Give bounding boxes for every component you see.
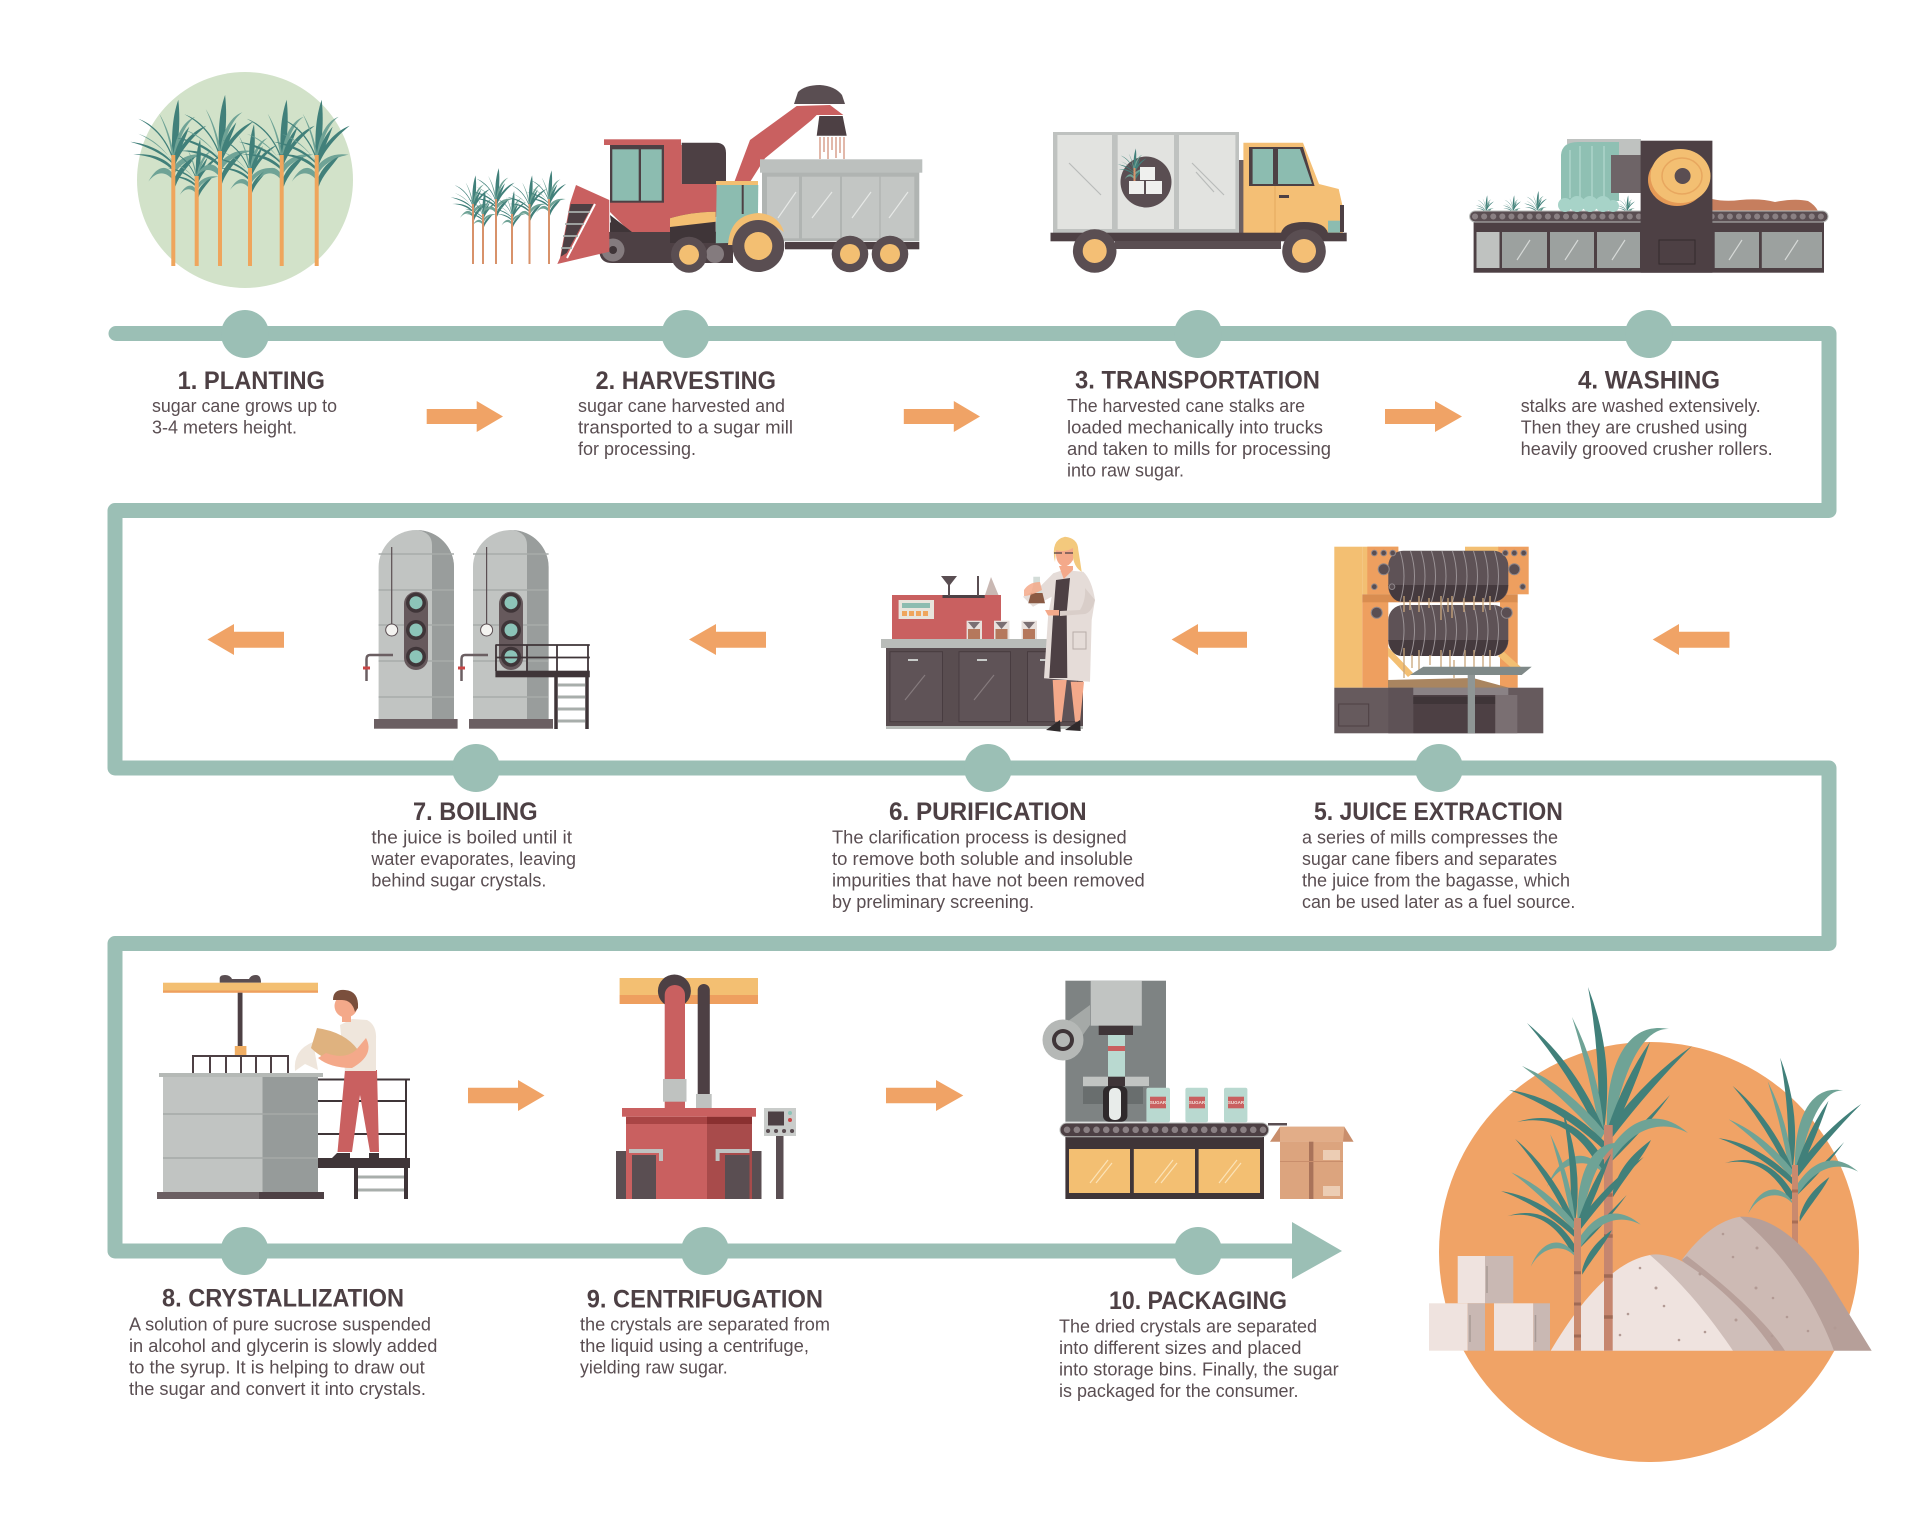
description 2: sugar cane harvested and bbox=[578, 396, 785, 416]
panel: step 6 purification bbox=[832, 537, 1145, 912]
description 9: yielding raw sugar. bbox=[580, 1358, 728, 1378]
description 10 bbox=[1059, 1316, 1339, 1401]
description 5: can be used later as a fuel source. bbox=[1302, 892, 1575, 912]
arrow 8 to 9 bbox=[468, 1080, 544, 1111]
heading 5: 5. JUICE EXTRACTION bbox=[1314, 798, 1563, 826]
icon: short sugar cane bbox=[1501, 1111, 1644, 1351]
description 3: The harvested cane stalks are bbox=[1067, 396, 1305, 416]
icon: packaging machine and box: SUGAR bbox=[1150, 1100, 1167, 1105]
icon: packaging machine and box: SUGAR bbox=[1228, 1100, 1245, 1105]
panel: step 9 centrifugation bbox=[580, 974, 830, 1378]
description 2: transported to a sugar mill bbox=[578, 418, 793, 438]
description 8: in alcohol and glycerin is slowly added bbox=[129, 1336, 437, 1356]
description 5: sugar cane fibers and separates bbox=[1302, 849, 1557, 869]
arrow 4 to 5 bbox=[1653, 624, 1730, 655]
icon: packaging machine and box bbox=[1042, 981, 1354, 1199]
node 5 bbox=[1415, 744, 1463, 792]
description 10: into different sizes and placed bbox=[1059, 1338, 1301, 1358]
arrow 6 to 7 bbox=[689, 624, 766, 655]
icon: mill rollers bbox=[1334, 547, 1543, 733]
orange sun circle bbox=[1439, 1042, 1859, 1462]
icon: boiling tanks bbox=[363, 530, 590, 729]
heading 10: 10. PACKAGING bbox=[1109, 1287, 1287, 1315]
illustration: sugar result with cane, piles and cubes bbox=[1429, 987, 1872, 1462]
node 7 bbox=[452, 744, 500, 792]
icon: right sugar cane bbox=[1719, 1058, 1861, 1255]
arrow 2 to 3 bbox=[904, 401, 980, 432]
description 3: into raw sugar. bbox=[1067, 460, 1184, 480]
icon: truck bbox=[1050, 132, 1347, 273]
description 8: the sugar and convert it into crystals. bbox=[129, 1379, 426, 1399]
description 10: is packaged for the consumer. bbox=[1059, 1381, 1298, 1401]
panel: step 3 transportation bbox=[1050, 132, 1347, 480]
heading 2: 2. HARVESTING bbox=[596, 367, 776, 395]
panel: step 1 planting bbox=[130, 72, 353, 438]
panel: step 4 washing bbox=[1470, 139, 1828, 459]
arrow 1 to 2 bbox=[427, 401, 503, 432]
heading 1: 1. PLANTING bbox=[178, 367, 325, 395]
description 7: behind sugar crystals. bbox=[371, 870, 546, 890]
description 1: 3-4 meters height. bbox=[152, 418, 297, 438]
node 8 bbox=[220, 1227, 268, 1275]
description 8: A solution of pure sucrose suspended bbox=[129, 1315, 431, 1335]
description 6: to remove both soluble and insoluble bbox=[832, 849, 1133, 869]
description 4: stalks are washed extensively. bbox=[1521, 396, 1761, 416]
description 5 bbox=[1302, 828, 1575, 912]
description 10: into storage bins. Finally, the sugar bbox=[1059, 1360, 1339, 1380]
description 3: and taken to mills for processing bbox=[1067, 439, 1331, 459]
description 8 bbox=[129, 1315, 437, 1399]
panel: step 5 juice extraction bbox=[1302, 547, 1575, 912]
node 1 bbox=[221, 310, 269, 358]
heading 8: 8. CRYSTALLIZATION bbox=[162, 1285, 404, 1313]
heading 9: 9. CENTRIFUGATION bbox=[587, 1286, 823, 1314]
description 2 bbox=[578, 396, 793, 459]
panel: step 2 harvesting bbox=[451, 85, 922, 459]
description 10: The dried crystals are separated bbox=[1059, 1316, 1317, 1336]
icon: sugar cane in green circle bbox=[130, 72, 353, 288]
icon: packaging machine and box: SUGAR bbox=[1189, 1100, 1206, 1105]
heading 4: 4. WASHING bbox=[1578, 367, 1720, 395]
heading 3: 3. TRANSPORTATION bbox=[1075, 367, 1320, 395]
icon: lab bench and scientist bbox=[881, 537, 1095, 732]
description 6 bbox=[832, 828, 1145, 912]
icon: harvester, tractor and trailer bbox=[451, 85, 922, 273]
node 4 bbox=[1625, 310, 1673, 358]
description 4: Then they are crushed using bbox=[1521, 418, 1747, 438]
description 3 bbox=[1067, 396, 1331, 480]
icon: crystallization tank and worker bbox=[157, 975, 410, 1199]
panel: step 10 packaging bbox=[1042, 981, 1354, 1401]
description 8: to the syrup. It is helping to draw out bbox=[129, 1358, 425, 1378]
description 7 bbox=[370, 828, 576, 890]
description 7: water evaporates, leaving bbox=[370, 849, 576, 869]
description 6: by preliminary screening. bbox=[832, 892, 1034, 912]
arrow 3 to 4 bbox=[1385, 401, 1462, 432]
description 4 bbox=[1521, 396, 1773, 459]
description 5: a series of mills compresses the bbox=[1302, 828, 1558, 848]
icon: tall sugar cane bbox=[1509, 987, 1692, 1351]
heading 6: 6. PURIFICATION bbox=[889, 798, 1087, 826]
arrow 9 to 10 bbox=[886, 1080, 963, 1111]
description 9: the crystals are separated from bbox=[580, 1315, 830, 1335]
description 9 bbox=[580, 1315, 830, 1378]
node 6 bbox=[964, 744, 1012, 792]
icon: washing and crusher machine bbox=[1470, 139, 1828, 273]
description 1: sugar cane grows up to bbox=[152, 396, 337, 416]
heading 7: 7. BOILING bbox=[413, 798, 538, 826]
panel: step 7 boiling bbox=[363, 530, 590, 890]
node 3 bbox=[1174, 310, 1222, 358]
description 6: The clarification process is designed bbox=[832, 828, 1127, 848]
description 6: impurities that have not been removed bbox=[832, 870, 1145, 890]
description 5: the juice from the bagasse, which bbox=[1302, 870, 1570, 890]
node 2 bbox=[662, 310, 710, 358]
description 7: the juice is boiled until it bbox=[371, 828, 572, 848]
process path line bbox=[115, 334, 1829, 1251]
description 9: the liquid using a centrifuge, bbox=[580, 1336, 809, 1356]
description 1 bbox=[152, 396, 337, 438]
icon: sugar piles bbox=[1551, 1217, 1872, 1351]
description 4: heavily grooved crusher rollers. bbox=[1521, 439, 1773, 459]
description 2: for processing. bbox=[578, 439, 696, 459]
icon: centrifuge bbox=[616, 974, 796, 1199]
panel: step 8 crystallization bbox=[129, 975, 437, 1399]
arrow 5 to 6 bbox=[1172, 624, 1247, 655]
description 3: loaded mechanically into trucks bbox=[1067, 418, 1323, 438]
node 10 bbox=[1174, 1227, 1222, 1275]
node 9 bbox=[681, 1227, 729, 1275]
arrow 7 exit left bbox=[207, 624, 284, 655]
icon: sugar cubes bbox=[1429, 1256, 1550, 1351]
process path arrowhead bbox=[1292, 1222, 1342, 1279]
